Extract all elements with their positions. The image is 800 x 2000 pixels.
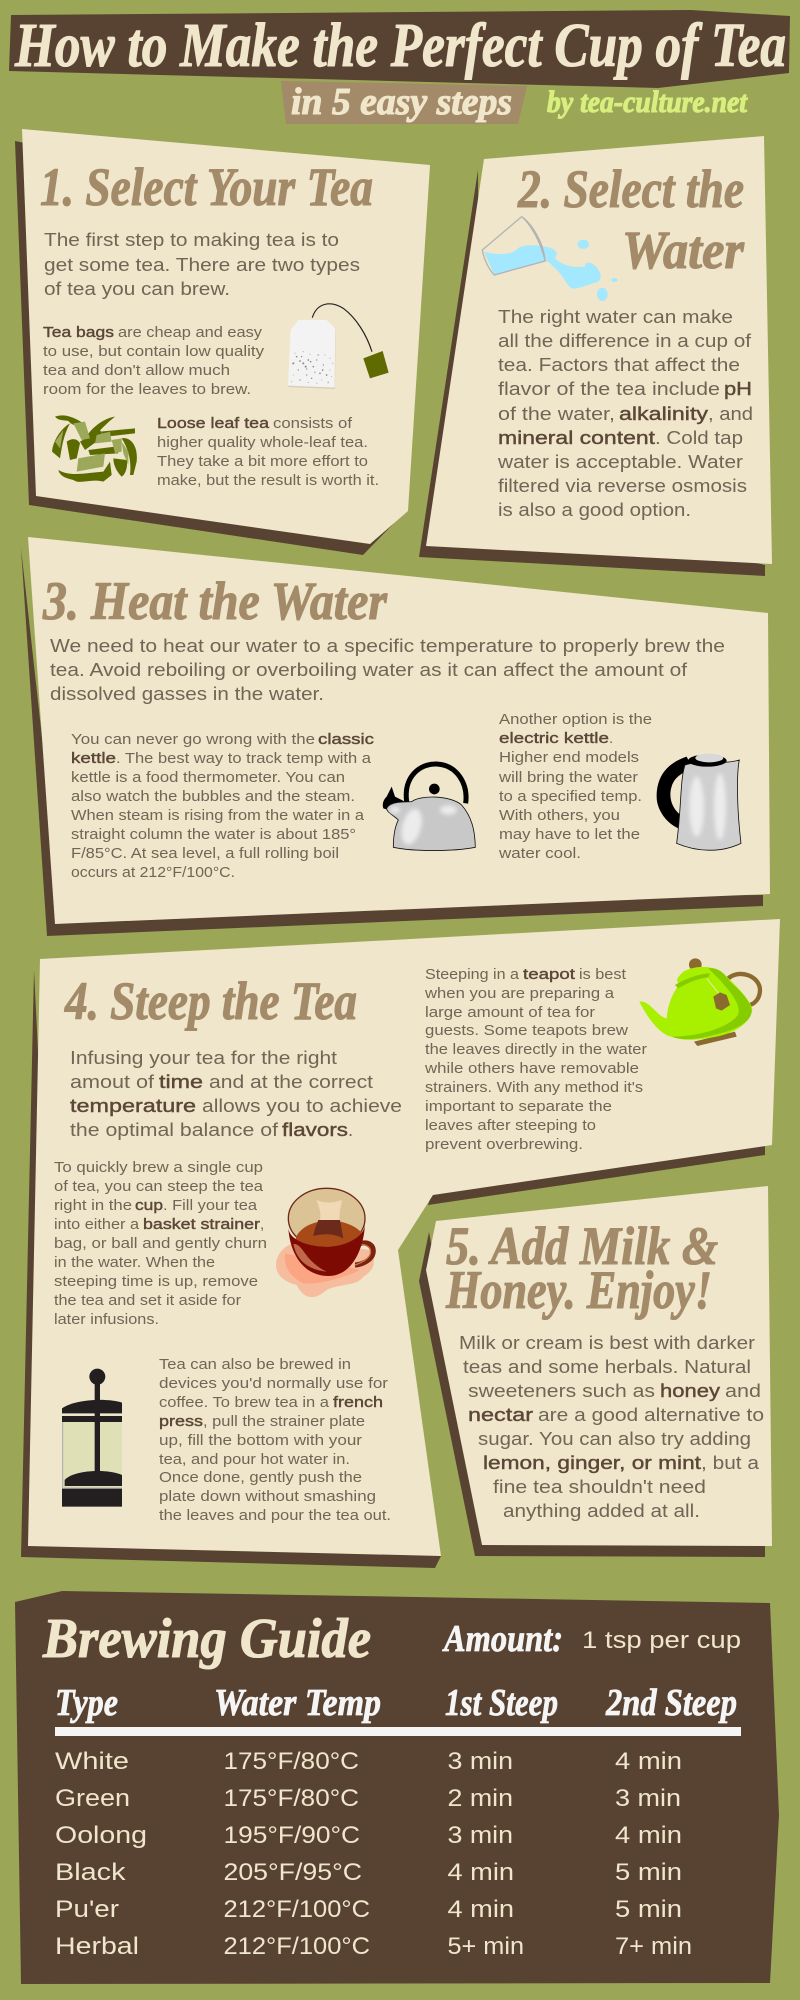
text: electric kettle: With others, you bbox=[499, 807, 620, 824]
body text: step 5: honey bbox=[660, 1380, 721, 1401]
row: herbal: Herbal bbox=[55, 1933, 139, 1960]
text: electric kettle bbox=[498, 711, 652, 862]
row: green: 175°F/80°C bbox=[224, 1785, 359, 1812]
row: pu'er: 212°F/100°C bbox=[224, 1896, 370, 1923]
body text: step 5: sugar. You can also try adding bbox=[478, 1428, 751, 1449]
text: cup brewing: , bbox=[260, 1216, 264, 1233]
intro text: step 1 bbox=[44, 229, 360, 299]
text: electric kettle: water cool. bbox=[498, 845, 581, 862]
body text: step 2: filtered via reverse osmosis bbox=[498, 475, 747, 496]
text: teapot: important to separate the bbox=[425, 1098, 612, 1115]
text: french press: plate down without smashing bbox=[159, 1488, 376, 1505]
text: electric kettle: electric kettle bbox=[499, 730, 609, 747]
panel: step 2 select the water bbox=[419, 136, 772, 576]
row: pu'er bbox=[55, 1896, 682, 1923]
body text: step 2: The right water can make bbox=[498, 306, 733, 327]
body text: step 2: tea. Factors that affect the bbox=[498, 354, 740, 375]
text: teapot: the leaves directly in the water bbox=[425, 1041, 647, 1058]
text: french press: Once done, gently push the bbox=[159, 1469, 362, 1486]
intro text: step 1: get some tea. There are two types bbox=[44, 254, 360, 275]
intro text: step 4: the optimal balance of bbox=[70, 1119, 279, 1140]
text: teapot: strainers. With any method it's bbox=[425, 1079, 643, 1096]
text: classic kettle: classic bbox=[318, 731, 375, 748]
table header rule bbox=[55, 1727, 741, 1736]
icon: green teapot bbox=[639, 958, 760, 1046]
text: teapot: when you are preparing a bbox=[424, 985, 615, 1002]
body text: step 5: sweeteners such as bbox=[468, 1380, 655, 1401]
amount label: Amount: bbox=[442, 1618, 563, 1660]
body text: step 5 bbox=[459, 1332, 764, 1521]
row: herbal: 5+ min bbox=[448, 1933, 524, 1960]
body text: step 5: lemon, ginger, or mint bbox=[483, 1452, 701, 1473]
text: tea bags: are cheap and easy bbox=[118, 324, 263, 341]
text: classic kettle: kettle is a food thermometer. You can bbox=[71, 769, 345, 786]
text: classic kettle: also watch the bubbles and the steam. bbox=[71, 788, 355, 805]
text: teapot: guests. Some teapots brew bbox=[425, 1022, 628, 1039]
icon: loose leaf tea bbox=[52, 415, 137, 482]
body text: step 2: water is acceptable. Water bbox=[497, 451, 743, 472]
row: oolong bbox=[55, 1822, 682, 1849]
intro text: step 3: dissolved gasses in the water. bbox=[50, 683, 324, 704]
heading: step 4: 4. Steep the Tea bbox=[64, 971, 357, 1031]
row: green: 3 min bbox=[615, 1785, 681, 1812]
row: herbal bbox=[55, 1933, 692, 1960]
intro text: step 4: . bbox=[348, 1119, 353, 1140]
body text: step 5: Milk or cream is best with darker bbox=[459, 1332, 755, 1353]
heading: step 2 bbox=[517, 159, 745, 280]
body text: step 2 bbox=[497, 306, 753, 520]
text: teapot: is best bbox=[579, 966, 627, 983]
table header row: 2nd Steep bbox=[605, 1682, 737, 1724]
row: black: 4 min bbox=[448, 1859, 514, 1886]
row: oolong: 4 min bbox=[615, 1822, 682, 1849]
row: herbal: 212°F/100°C bbox=[224, 1933, 370, 1960]
text: teapot: while others have removable bbox=[424, 1060, 639, 1077]
body text: step 2: alkalinity bbox=[619, 403, 709, 424]
panel: step 1 select your tea bbox=[15, 129, 430, 555]
text: electric kettle: will bring the water bbox=[498, 769, 638, 786]
amount value: 1 tsp per cup bbox=[582, 1627, 741, 1654]
text: loose leaf tea: consists of bbox=[273, 415, 353, 432]
row: oolong: 195°F/90°C bbox=[224, 1822, 360, 1849]
body text: step 2: of the water, bbox=[498, 403, 615, 424]
text: electric kettle: Another option is the bbox=[499, 711, 652, 728]
body text: step 2: flavor of the tea include bbox=[498, 378, 720, 399]
text: classic kettle: F/85°C. At sea level, a full rolling boil bbox=[71, 845, 339, 862]
text: teapot: leaves after steeping to bbox=[425, 1117, 596, 1134]
credit: by tea-culture.net: by tea-culture.net bbox=[547, 84, 748, 119]
body text: step 5: , but a bbox=[701, 1452, 760, 1473]
text: tea bags bbox=[43, 324, 265, 398]
text: french press: Tea can also be brewed in bbox=[159, 1356, 351, 1373]
text: french press bbox=[159, 1356, 391, 1524]
icon: electric kettle bbox=[657, 754, 741, 850]
text: teapot: prevent overbrewing. bbox=[425, 1136, 583, 1153]
text: cup brewing: in the water. When the bbox=[54, 1254, 215, 1271]
text: cup brewing: into either a bbox=[54, 1216, 140, 1233]
body text: step 2: is also a good option. bbox=[498, 499, 691, 520]
intro text: step 1: The first step to making tea is to bbox=[44, 229, 339, 250]
text: classic kettle bbox=[71, 731, 375, 881]
row: pu'er: 4 min bbox=[448, 1896, 514, 1923]
text: french press: the leaves and pour the tea out. bbox=[159, 1507, 391, 1524]
text: cup brewing bbox=[54, 1159, 267, 1328]
text: cup brewing: later infusions. bbox=[54, 1311, 159, 1328]
text: cup brewing: bag, or ball and gently churn bbox=[54, 1235, 267, 1252]
table header row: Water Temp bbox=[214, 1682, 381, 1724]
text: cup brewing: the tea and set it aside for bbox=[54, 1292, 241, 1309]
intro text: step 3: tea. Avoid reboiling or overboiling water as it can affect the amount of bbox=[50, 659, 688, 680]
row: oolong: Oolong bbox=[55, 1822, 147, 1849]
intro text: step 4: and at the correct bbox=[209, 1071, 373, 1092]
row: herbal: 7+ min bbox=[615, 1933, 692, 1960]
text: classic kettle: You can never go wrong with the bbox=[71, 731, 315, 748]
text: cup brewing: basket strainer bbox=[143, 1216, 260, 1233]
row: white: 175°F/80°C bbox=[224, 1748, 359, 1775]
heading: brewing guide: Brewing Guide bbox=[42, 1608, 371, 1670]
text: electric kettle: . bbox=[609, 730, 613, 747]
subtitle banner: in 5 easy steps bbox=[291, 81, 512, 123]
body text: step 2: mineral content bbox=[498, 427, 655, 448]
row: oolong: 3 min bbox=[448, 1822, 513, 1849]
text: electric kettle: to a specified temp. bbox=[499, 788, 642, 805]
row: pu'er: Pu'er bbox=[55, 1896, 119, 1923]
text: classic kettle: straight column the water is about 185° bbox=[71, 826, 356, 843]
text: loose leaf tea bbox=[157, 415, 379, 489]
intro text: step 4: flavors bbox=[282, 1119, 348, 1140]
body text: step 5: anything added at all. bbox=[503, 1500, 700, 1521]
heading: step 3: 3. Heat the Water bbox=[42, 571, 388, 631]
panel: step 4 steep the tea bbox=[21, 919, 780, 1568]
text: tea bags: tea and don't allow much bbox=[43, 362, 230, 379]
row: green bbox=[55, 1785, 681, 1812]
text: cup brewing: right in the bbox=[54, 1197, 132, 1214]
text: classic kettle: When steam is rising from the water in a bbox=[71, 807, 365, 824]
heading: step 5: Honey. Enjoy! bbox=[445, 1260, 712, 1320]
body text: step 5: nectar bbox=[468, 1404, 533, 1425]
text: tea bags: Tea bags bbox=[43, 324, 114, 341]
intro text: step 4 bbox=[70, 1047, 402, 1140]
row: white: 3 min bbox=[448, 1748, 513, 1775]
table header row bbox=[55, 1682, 737, 1724]
text: electric kettle: Higher end models bbox=[499, 749, 639, 766]
heading: step 5: 5. Add Milk & bbox=[446, 1216, 718, 1276]
body text: step 2: all the difference in a cup of bbox=[498, 330, 752, 351]
text: classic kettle: kettle bbox=[71, 750, 116, 767]
table header row: 1st Steep bbox=[445, 1682, 558, 1724]
heading: step 2: Water bbox=[622, 220, 745, 280]
text: cup brewing: steeping time is up, remove bbox=[54, 1273, 258, 1290]
body text: step 5: and bbox=[725, 1380, 761, 1401]
row: green: Green bbox=[55, 1785, 130, 1812]
text: teapot bbox=[424, 966, 647, 1153]
text: teapot: large amount of tea for bbox=[425, 1004, 595, 1021]
text: cup brewing: To quickly brew a single cup bbox=[54, 1159, 263, 1176]
row: black: 5 min bbox=[615, 1859, 682, 1886]
text: classic kettle: . The best way to track temp with a bbox=[116, 750, 372, 767]
row: black: 205°F/95°C bbox=[224, 1859, 362, 1886]
body text: step 2: pH bbox=[724, 378, 752, 399]
panel: step 5 add milk and honey bbox=[419, 1186, 772, 1557]
intro text: step 4: time bbox=[159, 1071, 203, 1092]
text: teapot: Steeping in a bbox=[425, 966, 520, 983]
text: loose leaf tea: higher quality whole-leaf tea. bbox=[157, 434, 368, 451]
row: white: White bbox=[55, 1748, 129, 1775]
text: electric kettle: may have to let the bbox=[499, 826, 640, 843]
table header row: Type bbox=[55, 1682, 118, 1724]
text: cup brewing: cup bbox=[135, 1197, 163, 1214]
text: french press: up, fill the bottom with your bbox=[159, 1432, 362, 1449]
text: teapot: teapot bbox=[523, 966, 576, 983]
text: loose leaf tea: They take a bit more effort to bbox=[157, 453, 368, 470]
icon: french press bbox=[62, 1369, 122, 1507]
row: white: 4 min bbox=[615, 1748, 682, 1775]
panel: step 3 heat the water bbox=[21, 537, 770, 936]
intro text: step 4: allows you to achieve bbox=[202, 1095, 402, 1116]
row: black bbox=[55, 1859, 682, 1886]
text: french press: french bbox=[333, 1394, 383, 1411]
text: french press: devices you'd normally use for bbox=[159, 1375, 388, 1392]
body text: step 2: . Cold tap bbox=[655, 427, 743, 448]
icon: cup of tea bbox=[276, 1188, 374, 1297]
text: tea bags: to use, but contain low quality bbox=[43, 343, 265, 360]
text: cup brewing: of tea, you can steep the tea bbox=[54, 1178, 264, 1195]
icon: classic kettle bbox=[383, 764, 475, 851]
row: green: 2 min bbox=[448, 1785, 513, 1812]
intro text: step 4: amout of bbox=[70, 1071, 155, 1092]
heading: step 2: 2. Select the bbox=[517, 159, 744, 219]
text: tea bags: room for the leaves to brew. bbox=[43, 381, 251, 398]
panel: brewing guide bbox=[15, 1591, 779, 1984]
text: cup brewing: . Fill your tea bbox=[163, 1197, 258, 1214]
text: french press: tea, and pour hot water in. bbox=[159, 1451, 350, 1468]
heading: step 5 bbox=[445, 1216, 718, 1320]
text: classic kettle: occurs at 212°F/100°C. bbox=[71, 864, 235, 881]
body text: step 5: teas and some herbals. Natural bbox=[463, 1356, 751, 1377]
intro text: step 3 bbox=[50, 635, 725, 704]
intro text: step 4: temperature bbox=[70, 1095, 196, 1116]
text: french press: press bbox=[159, 1413, 203, 1430]
intro text: step 4: Infusing your tea for the right bbox=[70, 1047, 337, 1068]
icon: tea bag bbox=[288, 304, 389, 389]
intro text: step 1: of tea you can brew. bbox=[44, 278, 230, 299]
row: white bbox=[55, 1748, 682, 1775]
body text: step 5: are a good alternative to bbox=[538, 1404, 764, 1425]
intro text: step 3: We need to heat our water to a specific temperature to properly brew the bbox=[50, 635, 725, 656]
text: french press: coffee. To brew tea in a bbox=[159, 1394, 330, 1411]
text: french press: , pull the strainer plate bbox=[203, 1413, 365, 1430]
body text: step 2: , and bbox=[708, 403, 753, 424]
row: pu'er: 5 min bbox=[615, 1896, 682, 1923]
icon: pouring glass of water bbox=[482, 217, 618, 301]
row: black: Black bbox=[55, 1859, 127, 1886]
heading: step 1: 1. Select Your Tea bbox=[40, 157, 373, 217]
body text: step 5: fine tea shouldn't need bbox=[493, 1476, 706, 1497]
text: loose leaf tea: make, but the result is worth it. bbox=[157, 472, 379, 489]
text: loose leaf tea: Loose leaf tea bbox=[157, 415, 270, 432]
